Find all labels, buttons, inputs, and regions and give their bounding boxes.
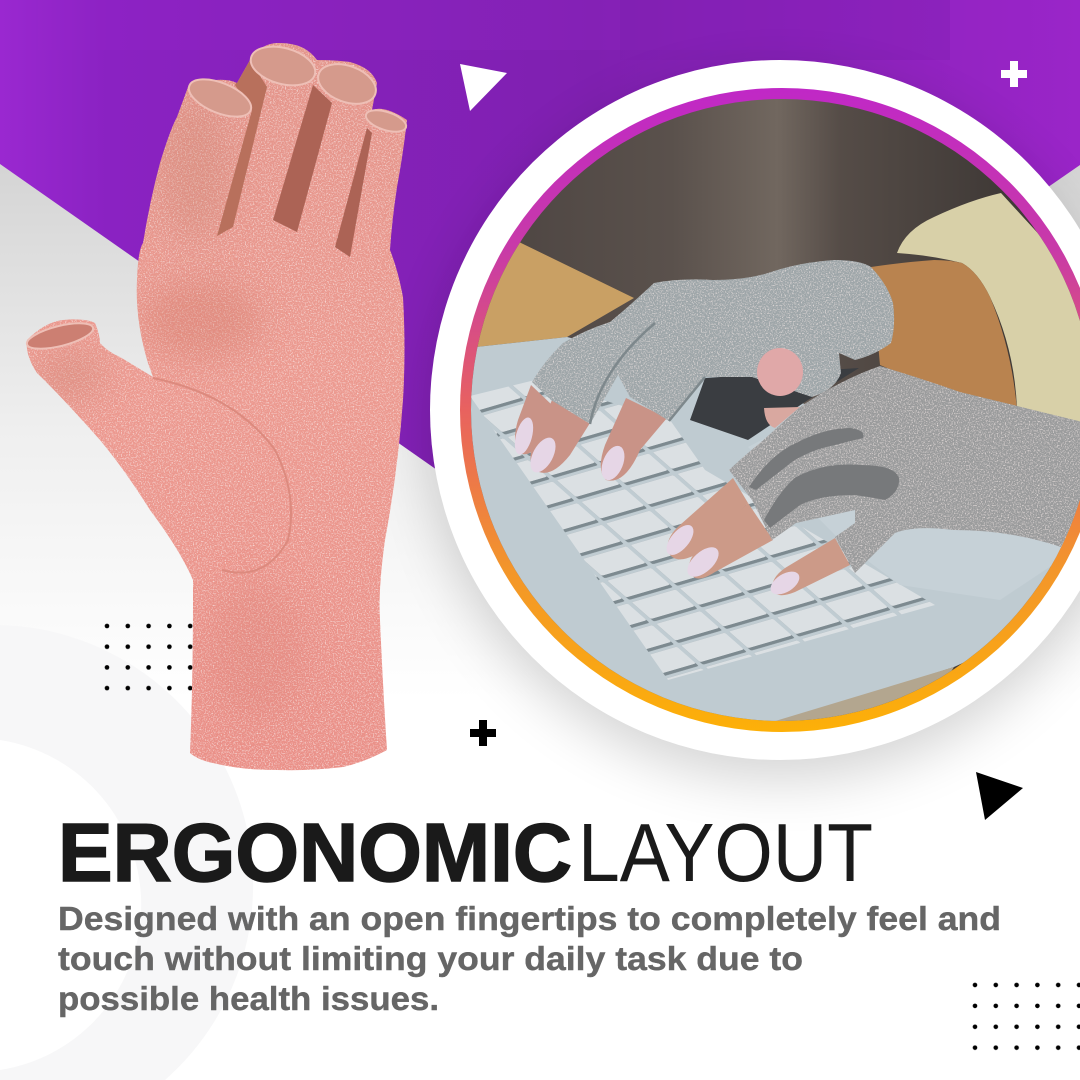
upper hand nails	[514, 418, 624, 480]
dark laptop gap	[690, 368, 859, 440]
sleeve	[897, 193, 1080, 432]
upper glove	[532, 260, 894, 424]
background decorative circles	[0, 625, 253, 1080]
fingertip cuffs	[25, 40, 409, 354]
desk	[478, 242, 634, 347]
white circle frame	[430, 60, 1080, 780]
title: ERGONOMIC	[58, 806, 572, 899]
body text: possible health issues.	[58, 980, 439, 1017]
dot grid left	[104, 623, 194, 693]
upper glove seams	[590, 323, 705, 424]
body text	[58, 900, 1001, 1017]
icon: white triangle	[460, 64, 507, 111]
keyboard	[470, 380, 935, 680]
upper hand fingers	[515, 385, 667, 481]
lower hand nails	[666, 525, 800, 594]
laptop	[460, 337, 1080, 730]
icon: black triangle	[976, 772, 1023, 820]
upper glove thumb	[757, 348, 803, 396]
dot grid right	[972, 982, 1080, 1052]
trackpad	[898, 526, 1070, 585]
gradient ring	[460, 88, 1080, 732]
photo: hands typing on laptop	[460, 90, 1080, 735]
finger gaps	[217, 60, 372, 257]
title: LAYOUT	[578, 806, 873, 899]
lower glove	[729, 366, 1080, 573]
glove shading	[35, 100, 305, 720]
body text: Designed with an open fingertips to completely feel and	[58, 900, 1001, 937]
lower hand fingers	[668, 407, 850, 595]
wrist	[871, 260, 1017, 410]
pink glove	[20, 35, 420, 775]
title	[58, 806, 873, 899]
icon: black plus	[470, 720, 496, 746]
purple banner	[0, 0, 1080, 540]
icon: white plus	[1001, 61, 1027, 87]
lower glove recessed finger slots	[749, 428, 899, 528]
thumb pad seam	[153, 378, 291, 573]
body text: touch without limiting your daily task due to	[58, 940, 803, 977]
